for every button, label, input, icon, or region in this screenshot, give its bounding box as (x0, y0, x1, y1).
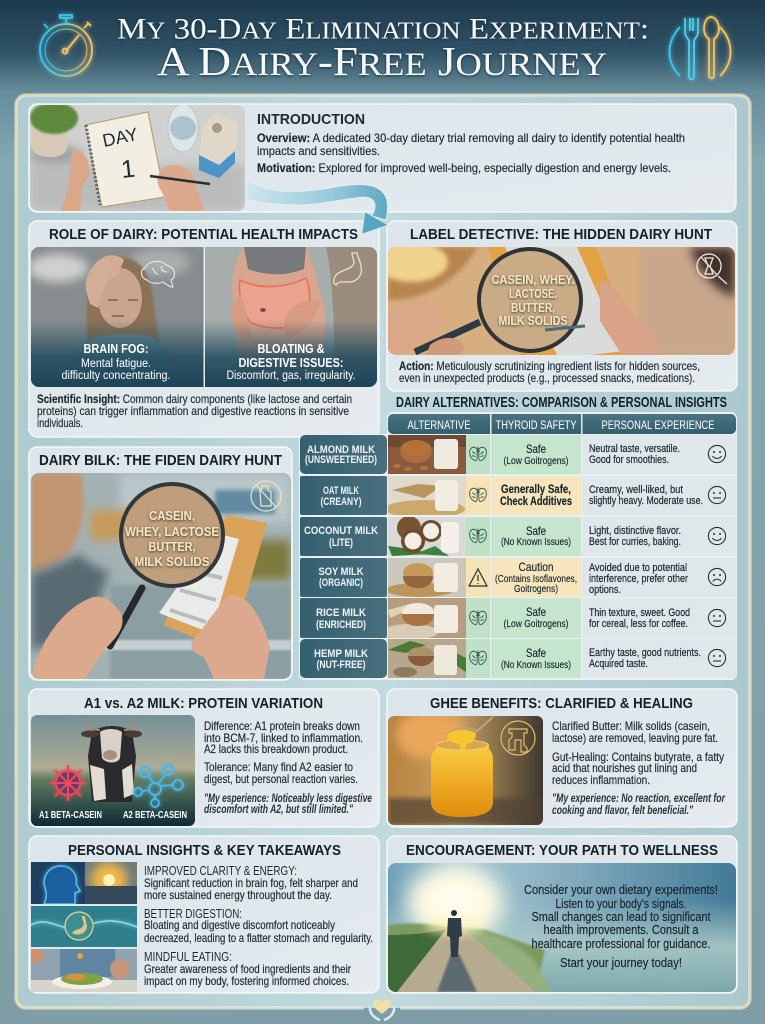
scientific insight text: individuals. (37, 416, 83, 430)
icon: no dairy (251, 481, 281, 511)
a1 a2 heading: A1 vs. A2 MILK: PROTEIN VARIATION (84, 695, 323, 712)
row: rice milk (300, 598, 736, 640)
row: soy milk: Goitrogens) (514, 583, 558, 595)
intro text: Motivation: Explored for improved well-being, especially digestion and energy levels. (257, 161, 671, 175)
ghee heading: GHEE BENEFITS: CLARIFIED & HEALING (430, 695, 693, 712)
row: almond milk: Good for smoothies. (589, 454, 669, 466)
scientific insight text: Scientific Insight: Common dairy components (like lactose and certain (37, 392, 352, 406)
image: mindful meal (26, 949, 137, 992)
row: rice milk: Thin texture, sweet. Good (589, 607, 690, 619)
caption: bloating: Discomfort, gas, irregularity. (226, 370, 356, 382)
row: coconut milk: Light, distinctive flavor. (589, 525, 681, 537)
image: reading a label (388, 247, 735, 355)
magnifier text: CASEIN, WHEY. (492, 272, 574, 287)
image labels: A2 BETA-CASEIN (123, 810, 187, 821)
magnifier text: BUTTER, (148, 539, 196, 554)
row: hemp milk: (NUT-FREE) (316, 659, 366, 671)
a1 a2 text (204, 719, 372, 816)
row: oat milk: (CREANY) (320, 496, 362, 508)
row: coconut milk: Best for curries, baking. (589, 536, 681, 548)
row: soy milk: Caution (518, 560, 554, 574)
insight: clarity and energy: Significant reduction in brain fog, felt sharper and (144, 876, 358, 890)
image: day 1 notebook: DAY (101, 124, 140, 151)
encouragement text: healthcare professional for guidance. (532, 937, 710, 951)
encouragement text: Listen to your body's signals. (556, 897, 686, 911)
row: almond milk: Neutral taste, versatile. (589, 443, 680, 455)
a1 a2 text: Tolerance: Many find A2 easier to (204, 760, 353, 774)
icon: no dairy search (697, 254, 727, 284)
intro heading: INTRODUCTION (257, 111, 365, 128)
insight: mindful eating: Greater awareness of food ingredients and their (144, 962, 351, 976)
row: coconut milk: Safe (526, 524, 546, 538)
panel: role of dairy (28, 221, 379, 437)
row: oat milk: OAT MILK (323, 485, 359, 497)
caption: brain fog (62, 342, 170, 382)
row: almond milk: Safe (526, 442, 546, 456)
row: hemp milk: Safe (526, 646, 546, 660)
magnifier text: BUTTER, (511, 300, 555, 315)
table header: ALTERNATIVE (408, 418, 470, 432)
scientific insight text: proteins) can trigger inflammation and digestive reactions in sensitive (37, 404, 349, 418)
row: oat milk: Generally Safe, (501, 482, 571, 496)
table header (388, 414, 736, 434)
row: coconut milk: COCONUT MILK (304, 525, 378, 537)
panel: a1 vs a2 (29, 689, 379, 827)
row: hemp milk: HEMP MILK (314, 648, 368, 660)
action text: Action: Meticulously scrutinizing ingredient lists for hidden sources, (399, 359, 700, 373)
insight: mindful eating: MINDFUL EATING: (144, 950, 232, 964)
title (117, 12, 649, 84)
magnifier text (492, 272, 574, 328)
image labels (39, 810, 187, 821)
panel: dairy bilk (29, 447, 292, 680)
row: coconut milk: (LITE) (329, 537, 353, 549)
icon: warning (469, 569, 487, 586)
panel: encouragement (387, 836, 737, 993)
row: coconut milk: (No Known Issues) (501, 536, 571, 548)
caption: brain fog: BRAIN FOG: (84, 342, 148, 356)
caption: bloating: DIGESTIVE ISSUES: (238, 356, 344, 370)
action text: even in unexpected products (e.g., processed snacks, medications). (399, 371, 695, 385)
label detective heading: LABEL DETECTIVE: THE HIDDEN DAIRY HUNT (410, 226, 712, 243)
icon: heart in hands (370, 999, 394, 1020)
table header: PERSONAL EXPERIENCE (602, 418, 714, 432)
row: soy milk: interference, prefer other (589, 573, 688, 585)
row: rice milk: (ENRICHED) (316, 619, 366, 631)
intro text: impacts and sensitivities. (257, 144, 380, 158)
magnifier text: MILK SOLIDS (498, 313, 568, 328)
ghee text: acid that nourishes gut lining and (552, 761, 697, 775)
row: almond milk (300, 435, 736, 474)
ghee text (552, 719, 725, 817)
row: hemp milk: (No Known Issues) (501, 659, 571, 671)
insight: better digestion: Bloating and digestive discomfort noticeably (144, 918, 335, 932)
scientific insight text (37, 392, 352, 430)
image: ghee jar (388, 711, 543, 825)
magnifier text: MILK SOLIDS (134, 554, 210, 569)
row: soy milk: SOY MILK (318, 566, 364, 578)
a1 a2 text: A2 lacks this breakdown product. (204, 742, 348, 756)
row: coconut milk (300, 516, 736, 556)
row: hemp milk: Acquired taste. (589, 658, 648, 670)
row: hemp milk (300, 639, 736, 678)
insight: better digestion: decreazed, leading to a flatter stomach and regularity. (144, 931, 373, 945)
icon: stopwatch (40, 15, 92, 76)
insight: clarity and energy (144, 864, 358, 902)
magnifier text: LACTOSE. (509, 286, 557, 301)
caption: brain fog: difficulty concentrating. (62, 370, 170, 382)
insight: mindful eating (144, 950, 351, 988)
caption: bloating: BLOATING & (258, 342, 324, 356)
insight: mindful eating: impact on my body, fostering informed choices. (144, 974, 349, 988)
ghee text: cooking and flavor, felt beneficial." (552, 805, 693, 817)
a1 a2 text: discomfort with A2, but still limited." (204, 804, 353, 816)
row: soy milk: options. (589, 584, 621, 596)
action text (399, 359, 700, 385)
caption: brain fog: Mental fatigue. (81, 358, 151, 370)
a1 a2 text: into BCM-7, linked to inflammation. (204, 731, 363, 745)
image: store label reading (31, 473, 291, 679)
row: rice milk: for cereal, less for coffee. (589, 618, 688, 630)
encouragement heading: ENCOURAGEMENT: YOUR PATH TO WELLNESS (406, 842, 718, 859)
a1 a2 text: digest, but personal reaction varies. (204, 772, 358, 786)
row: rice milk: Safe (526, 605, 546, 619)
personal insights heading: PERSONAL INSIGHTS & KEY TAKEAWAYS (68, 842, 341, 859)
encouragement text: health improvements. Consult a (544, 923, 699, 937)
panel: personal insights (26, 836, 379, 993)
caption: bloating (226, 342, 356, 382)
a1 a2 text: "My esperience: Noticeably less digestive (204, 793, 372, 805)
image: day 1 notebook: 1 (120, 155, 136, 184)
insight: better digestion (144, 907, 373, 945)
row: rice milk: RICE MILK (316, 607, 366, 619)
arrow: intro to sections (247, 180, 388, 234)
row: soy milk: (ORGANIC) (319, 577, 363, 589)
panel: label detective (376, 221, 737, 391)
table header: THYROID SAFETY (496, 418, 576, 432)
panel: ghee benefits (387, 689, 737, 827)
magnifier text: CASEIN, (149, 508, 195, 523)
row: oat milk (300, 476, 736, 518)
encouragement text: Consider your own dietary experiments! (524, 883, 718, 897)
image: brain fog and bloating (28, 247, 377, 387)
role heading: ROLE OF DAIRY: POTENTIAL HEALTH IMPACTS (49, 226, 358, 243)
encouragement text: Start your journey today! (560, 956, 682, 970)
ghee text: Clarified Butter: Milk solids (casein, (552, 719, 710, 733)
panel: introduction (27, 102, 736, 212)
image: path to wellness (388, 863, 736, 992)
image: cow and proteins (31, 715, 195, 826)
row: hemp milk: Earthy taste, good nutrients. (589, 647, 701, 659)
ghee text: Gut-Healing: Contains butyrate, a fatty (552, 750, 724, 764)
ghee text: lactose) are removed, leaving pure fat. (552, 731, 718, 745)
row: almond milk: (UNSWEETENED) (305, 454, 377, 466)
row: rice milk: (Low Goitrogens) (504, 618, 568, 630)
dairy bilk heading: DAIRY BILK: THE FIDEN DAIRY HUNT (39, 452, 282, 469)
encouragement text (524, 883, 718, 970)
a1 a2 text: Difference: A1 protein breaks down (204, 719, 360, 733)
row: oat milk: slightly heavy. Moderate use. (589, 495, 703, 507)
magnifier text (125, 508, 219, 569)
row: oat milk: Check Additives (500, 494, 572, 508)
row: almond milk: ALMOND MILK (307, 444, 375, 456)
insight: clarity and energy: more sustained energy throughout the day. (144, 888, 332, 902)
insight: better digestion: BETTER DIGESTION: (144, 907, 242, 921)
insight: clarity and energy: IMPROVED CLARITY & ENERGY: (144, 864, 297, 878)
icon: stomach (334, 253, 361, 285)
ghee text: reduces inflammation. (552, 773, 650, 787)
encouragement text: Small changes can lead to significant (532, 910, 711, 924)
title: A DAIRY-FREE JOURNEY (157, 38, 607, 84)
row: soy milk: (Contains Isoflavones, (495, 573, 577, 585)
image: brain and sunrise (31, 862, 137, 904)
title: MY 30-D AY ELIMINATION EXPERIMENT : (117, 12, 649, 46)
row: almond milk: (Low Goitrogens) (504, 455, 568, 467)
row: oat milk: Creamy, well-liked, but (589, 484, 683, 496)
row: soy milk (300, 558, 736, 597)
magnifier text: WHEY, LACTOSE (125, 524, 219, 539)
image: day 1 notebook (27, 102, 245, 212)
image labels: A1 BETA-CASEIN (39, 810, 102, 821)
intro text (257, 131, 685, 175)
intro text: Overview: A dedicated 30-day dietary trial removing all dairy to identify potential health (257, 131, 685, 145)
icon: brain (141, 261, 175, 287)
image: stomach on teal (31, 906, 137, 947)
row: soy milk: Avoided due to potential (589, 562, 687, 574)
table: dairy alternatives (299, 412, 737, 680)
icon: fork and spoon (670, 17, 730, 79)
